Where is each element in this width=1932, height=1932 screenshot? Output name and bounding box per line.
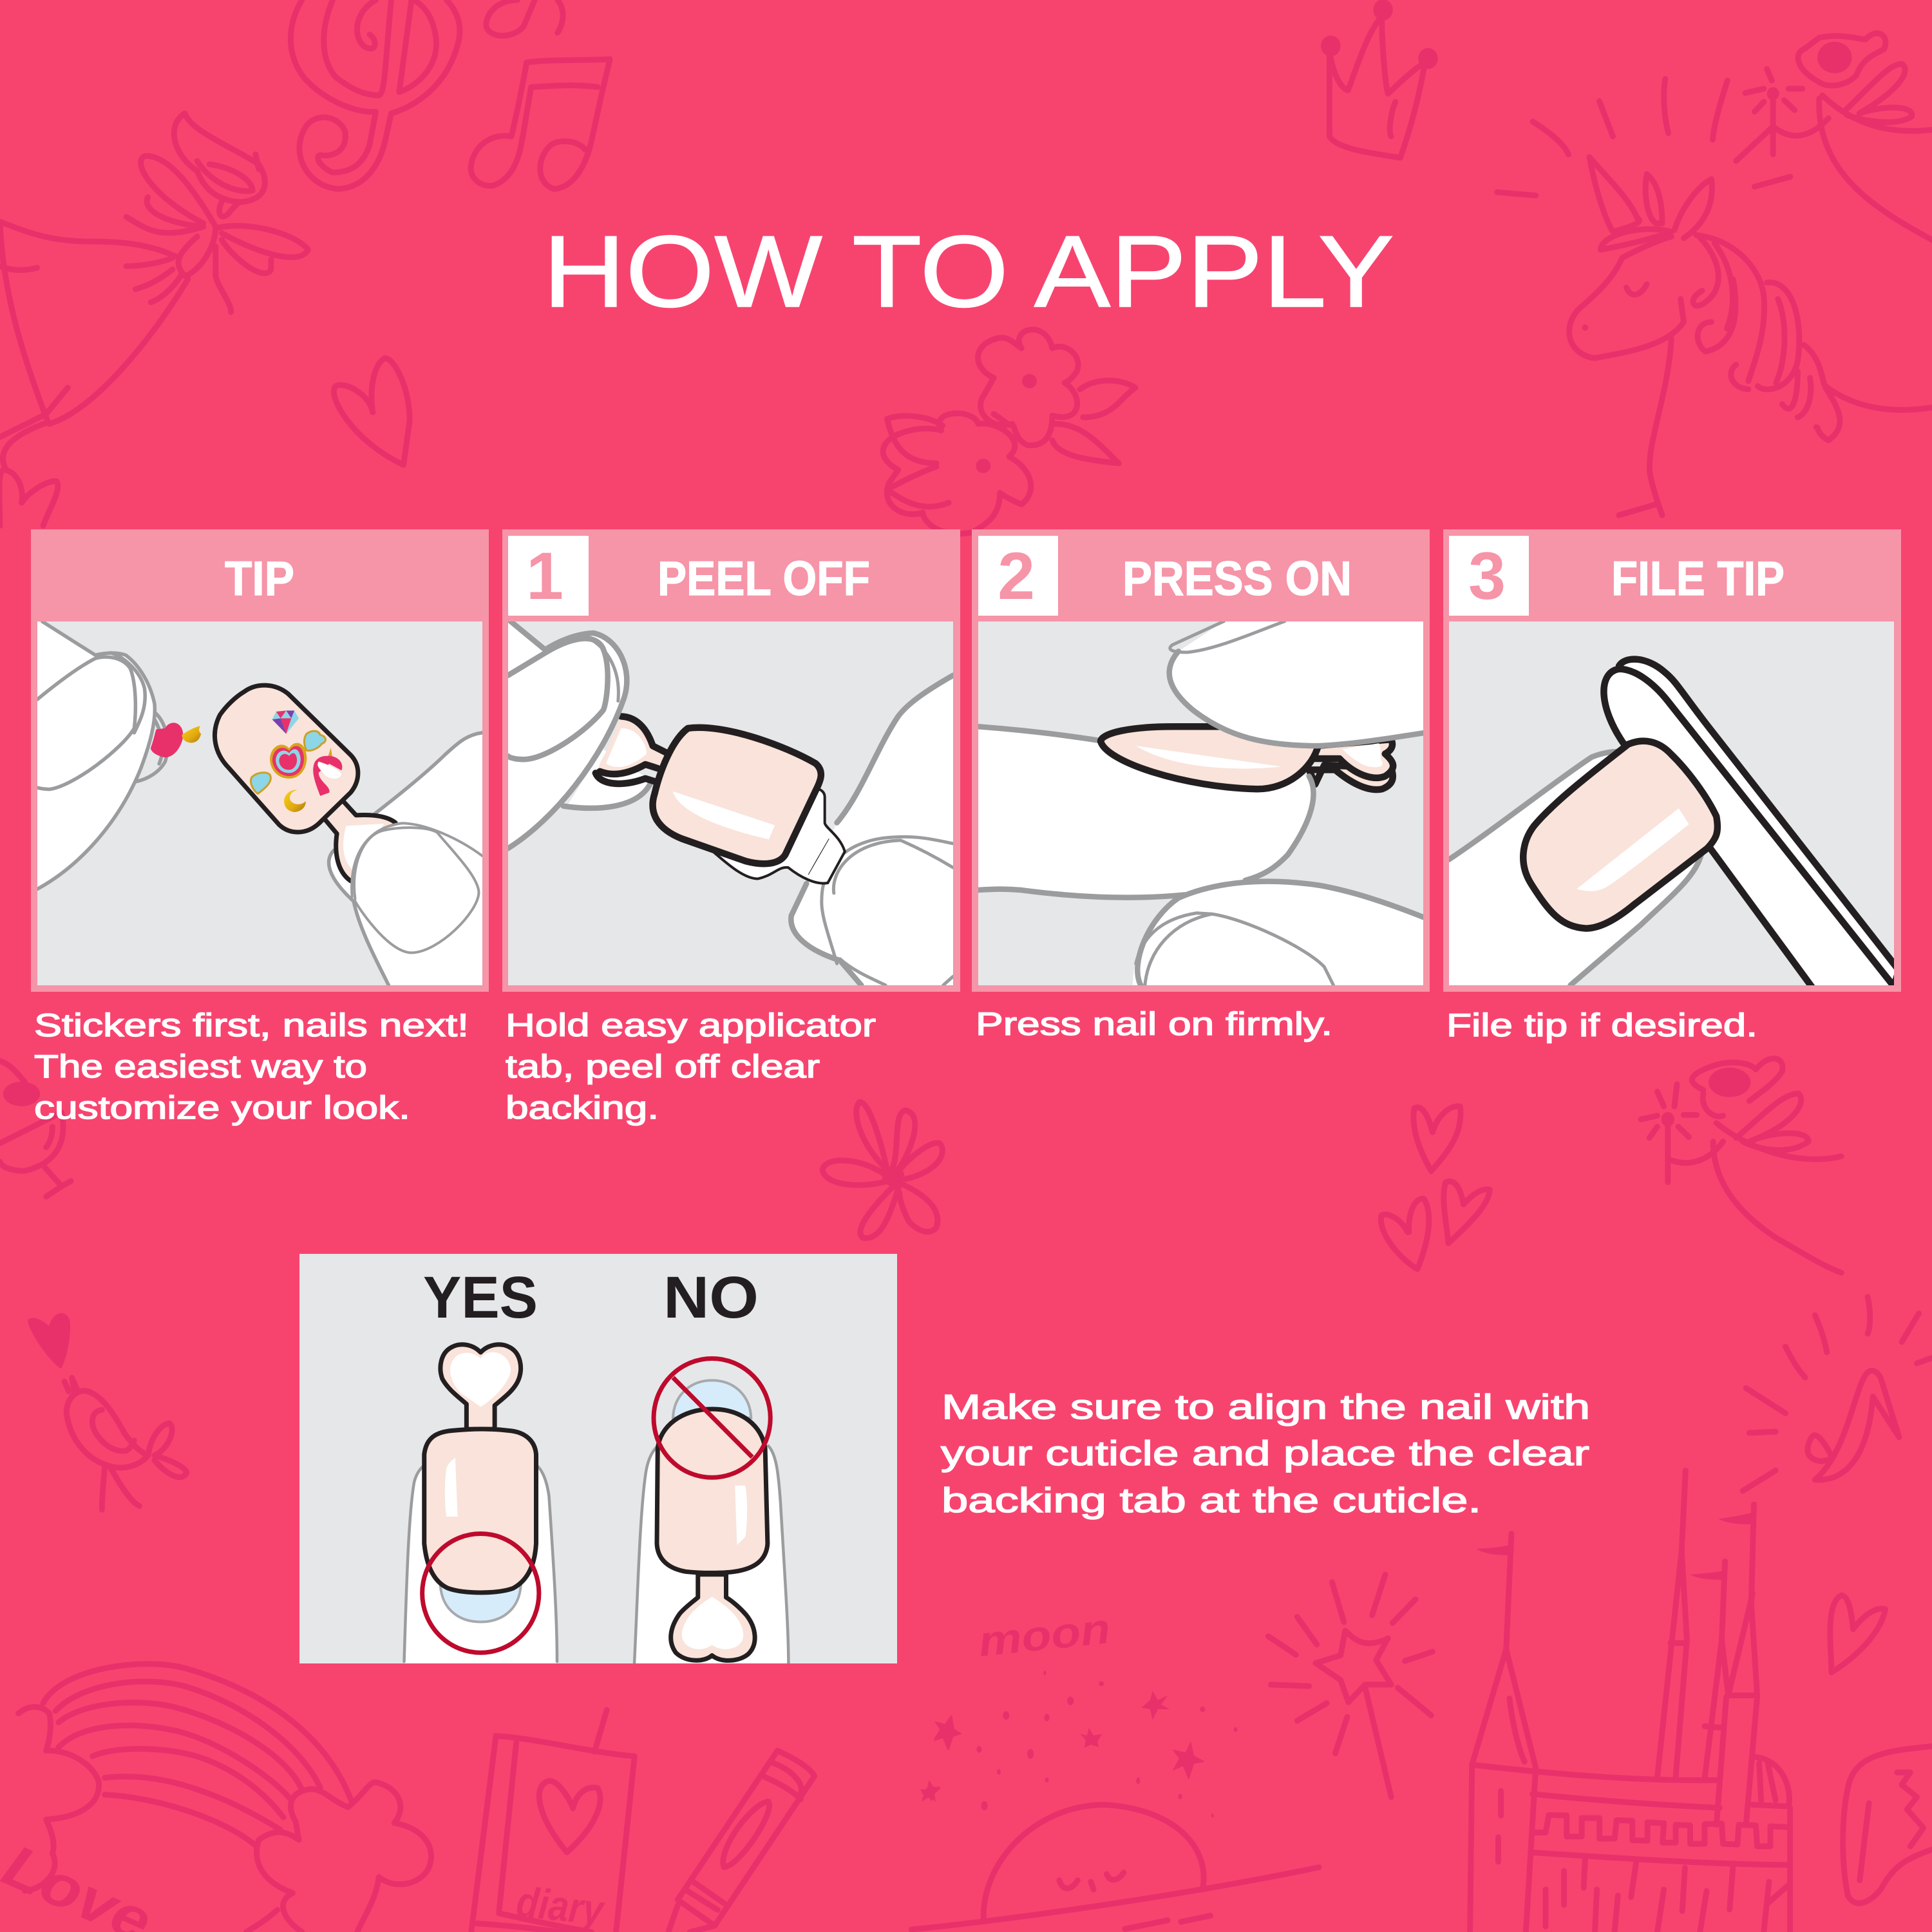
heading: peel off: PEEL OFF [658,551,870,605]
caption: peel off [506,1007,876,1126]
right fingers [329,733,482,985]
caption: peel off: Hold easy applicator [506,1007,876,1043]
caption: file tip: File tip if desired. [1446,1007,1757,1043]
panel: step 1 peel off [502,529,960,1126]
alignment instruction text: Make sure to align the nail with [942,1388,1590,1426]
illustration: filing nail tip [1449,659,1899,992]
caption: tip: Stickers first, nails next! [34,1007,469,1043]
alignment instruction text: your cuticle and place the clear [941,1434,1589,1473]
caption: tip [34,1007,469,1126]
nail side view [1101,726,1318,789]
applicator tab [325,802,396,882]
number badge 3 [1449,536,1529,616]
nail [1523,741,1718,929]
left thumb [37,621,167,889]
illustration: hands holding decorated nail [37,621,482,985]
caption: press on: Press nail on firmly. [976,1006,1332,1042]
illustration: pressing nail on finger [978,621,1423,985]
middle finger [978,726,1314,898]
left thumb [508,621,627,848]
back of left hand [568,750,648,805]
alignment instruction text [941,1388,1590,1520]
nail file [1604,659,1899,992]
label: yes: YES [423,1265,538,1331]
panel: tip [31,529,489,1126]
sticker: heart [270,743,307,779]
right hand [790,676,953,985]
tab layers [1309,739,1393,790]
red check circle [422,1533,539,1653]
number badge 1: 1 [526,539,564,614]
caption: tip: The easiest way to [34,1048,367,1084]
nail with stickers [214,685,358,832]
number badge 2 [978,536,1058,616]
clear backing film [709,788,845,884]
number badge 1 [508,536,589,616]
backing tab [596,716,667,784]
title: HOW TO APPLY [543,215,1394,328]
heading: file tip: FILE TIP [1611,551,1785,605]
red prohibition circle [654,1359,770,1477]
panel: step 3 file tip [1443,529,1901,1043]
no finger diagram [634,1359,788,1663]
caption: tip: customize your look. [34,1090,410,1126]
doodle word: moon: moon [976,1604,1112,1665]
sticker: clouds [251,731,326,793]
number badge 3: 3 [1468,539,1506,614]
heading: press on: PRESS ON [1122,551,1352,605]
upper finger [1170,621,1423,746]
number badge 2: 2 [998,539,1035,614]
sticker: diamond [272,710,299,734]
finger [1449,752,1701,985]
illustration: peeling backing from nail [508,621,953,985]
sticker: winged heart [151,723,201,757]
sticker: moon [284,790,306,812]
alignment instruction text: backing tab at the cuticle. [942,1481,1481,1520]
panel: step 2 press on [972,529,1430,1042]
nail [653,728,821,864]
label: no: NO [663,1265,759,1331]
sticker: unicorn [313,748,342,796]
caption: peel off: backing. [506,1090,659,1126]
lower finger [1133,882,1423,985]
heading: tip: TIP [225,551,294,605]
panel: yes / no placement [299,1254,897,1663]
caption: peel off: tab, peel off clear [506,1048,820,1084]
yes finger diagram [404,1345,557,1663]
